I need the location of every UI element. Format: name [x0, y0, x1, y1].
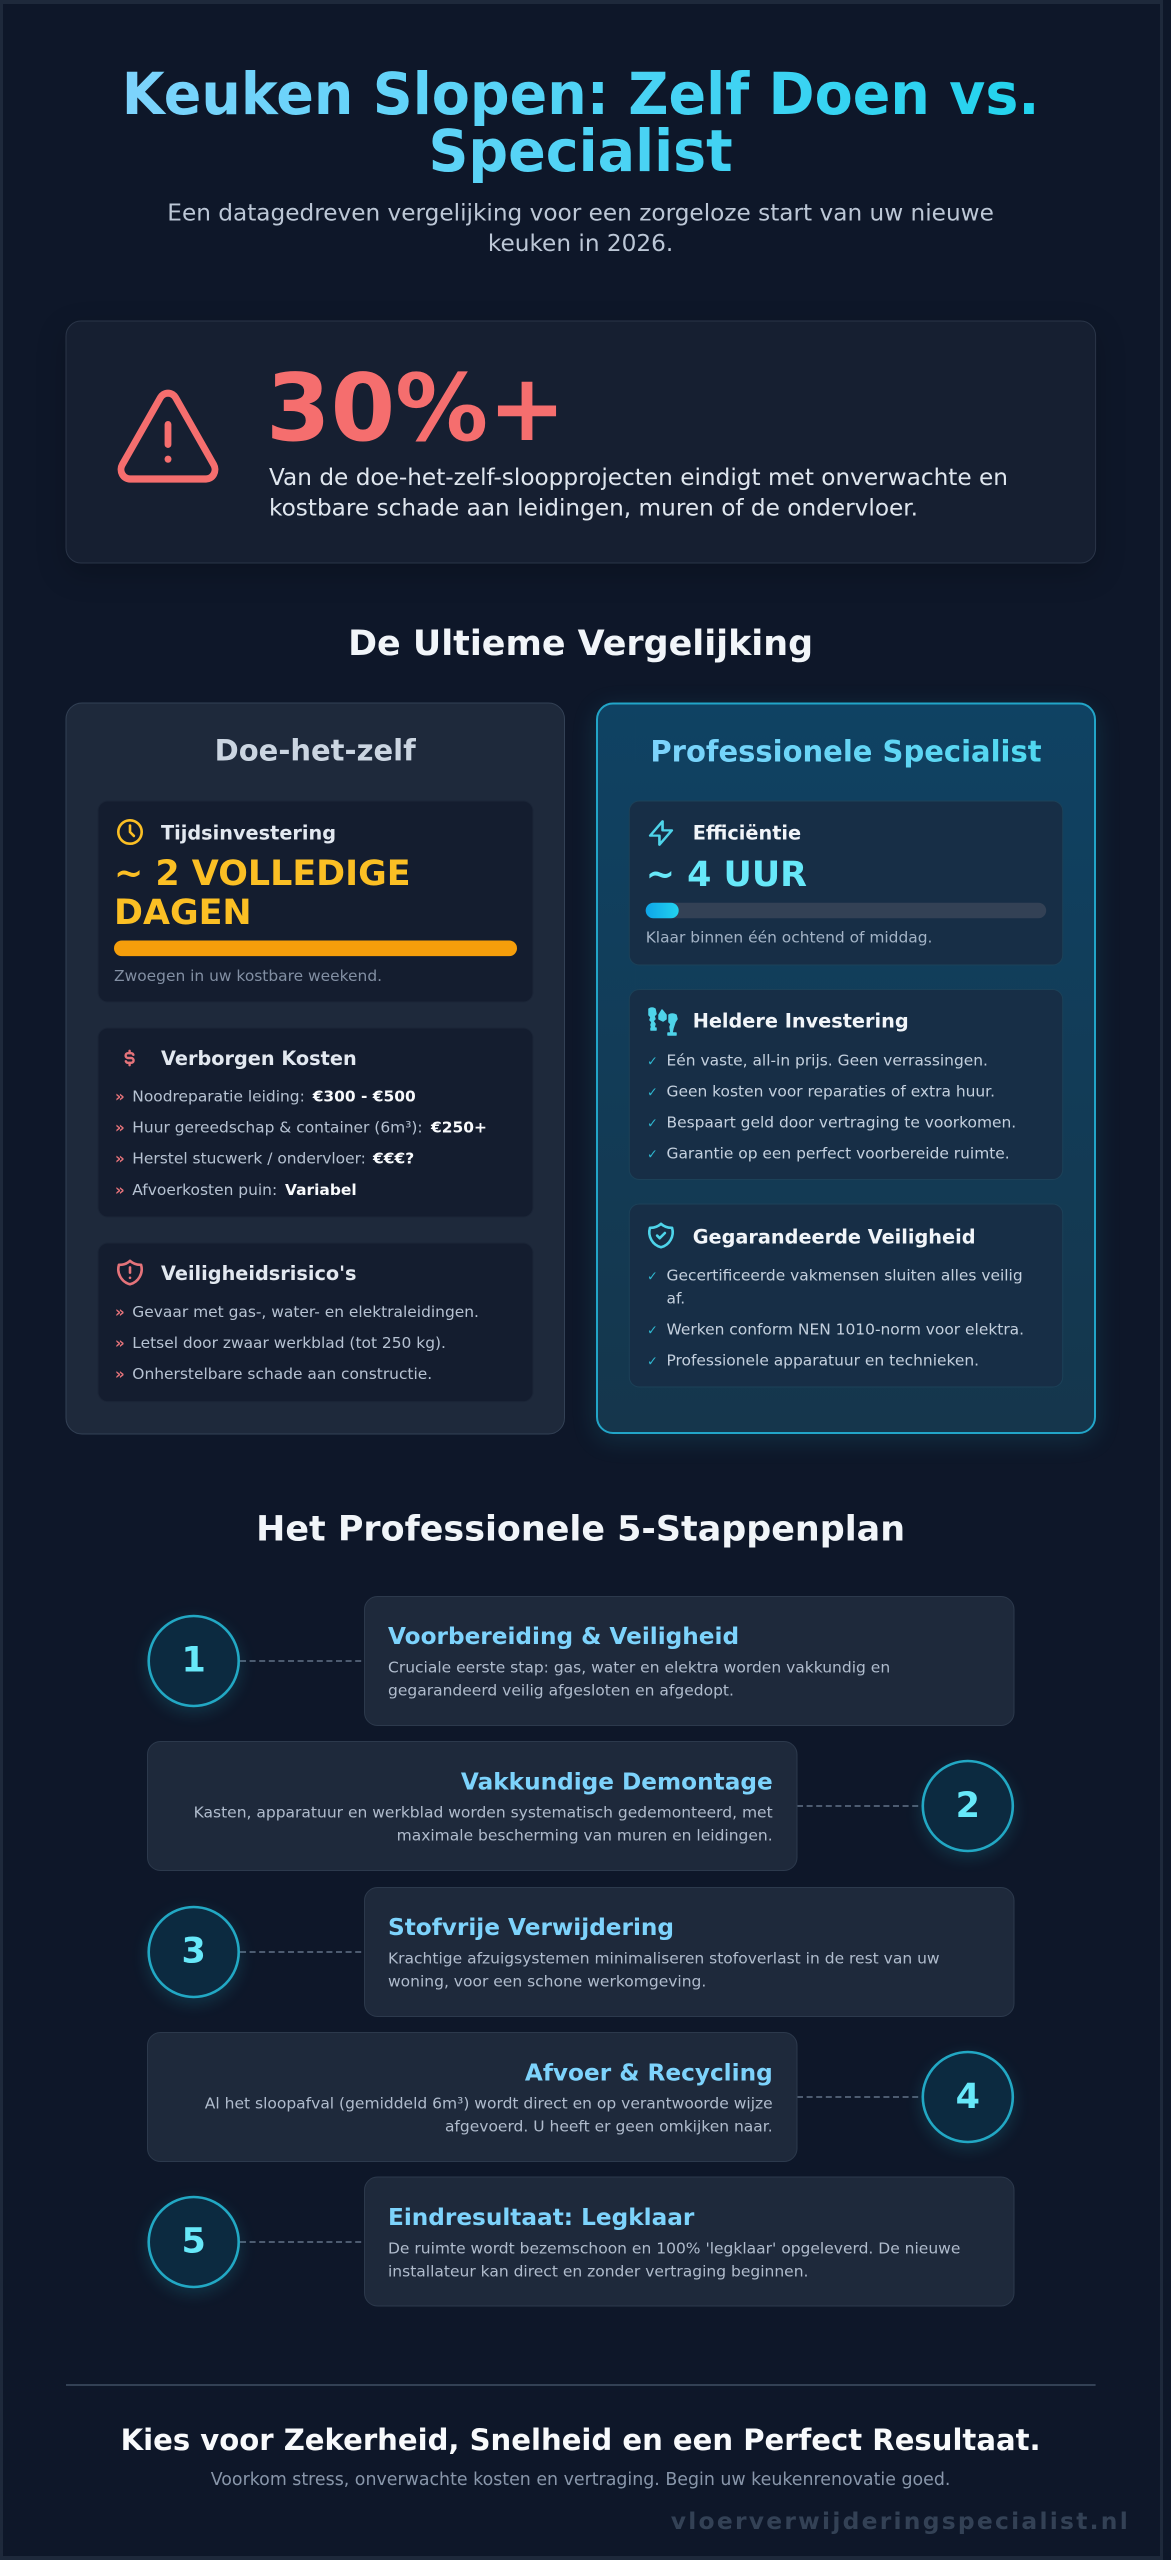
step 2: [148, 1742, 1013, 1870]
step card: [148, 1742, 797, 1870]
note: Zwoegen in uw kostbare weekend.: [114, 967, 382, 985]
step card: installateur kan direct en zonder vertraging beginnen.: [388, 2263, 808, 2281]
step card: Vakkundige Demontage: [461, 1768, 773, 1795]
step card: [148, 2032, 797, 2162]
panel: doe-het-zelf: [66, 703, 564, 1434]
safety list: ✓: [647, 1324, 658, 1339]
icon: bolt: [650, 821, 672, 845]
statistic description: [269, 464, 1008, 522]
card: efficiëntie: [629, 801, 1063, 965]
title: Keuken Slopen: Zelf Doen vs.: [122, 61, 1039, 128]
cost list: Huur gereedschap & container (6m³):: [132, 1119, 423, 1137]
step card: De ruimte wordt bezemschoon en 100% 'legklaar' opgeleverd. De nieuwe: [388, 2239, 960, 2257]
risk list: Letsel door zwaar werkblad (tot 250 kg).: [132, 1334, 446, 1352]
benefits list: [647, 1052, 1016, 1163]
progress bar: [646, 903, 1046, 918]
safety list: Werken conform NEN 1010-norm voor elektra.: [666, 1321, 1024, 1339]
step 1: [149, 1596, 1014, 1726]
step card: Voorbereiding & Veiligheid: [388, 1623, 739, 1650]
cost list: »: [115, 1150, 125, 1168]
safety list: [647, 1266, 1024, 1370]
panel: key statistic: [66, 321, 1096, 563]
step card: Al het sloopafval (gemiddeld 6m³) wordt direct en op verantwoorde wijze: [205, 2094, 773, 2112]
value: ~ 4 UUR: [646, 855, 807, 895]
card: gegarandeerde veiligheid: [629, 1204, 1063, 1387]
step number: 4: [956, 2077, 980, 2117]
safety list: af.: [666, 1290, 685, 1308]
label: Tijdsinvestering: [161, 821, 336, 844]
safety list: ✓: [647, 1355, 658, 1370]
risk list: »: [115, 1365, 125, 1383]
icon: dollar: [126, 1051, 134, 1065]
step card: Krachtige afzuigsystemen minimaliseren stofoverlast in de rest van uw: [388, 1949, 940, 1967]
risk list: »: [115, 1303, 125, 1321]
safety list: Professionele apparatuur en technieken.: [666, 1352, 979, 1370]
icon: shield alert: [118, 1261, 142, 1284]
footer subline: Voorkom stress, onverwachte kosten en vertraging. Begin uw keukenrenovatie goed.: [211, 2470, 950, 2490]
icon: cost symbol: [649, 1008, 677, 1035]
cost list: Noodreparatie leiding:: [132, 1088, 305, 1106]
step card: [364, 1888, 1014, 2016]
benefits list: ✓: [647, 1086, 658, 1101]
label: Gegarandeerde Veiligheid: [693, 1226, 976, 1248]
step number: 5: [182, 2222, 206, 2262]
subtitle: Een datagedreven vergelijking voor een zorgeloze start van uw nieuwe: [167, 200, 994, 227]
safety list: Gecertificeerde vakmensen sluiten alles veilig: [666, 1266, 1023, 1284]
step card: woning, voor een schone werkomgeving.: [388, 1973, 706, 1991]
step card: [364, 1596, 1014, 1726]
label: Efficiëntie: [693, 821, 801, 844]
step 4: [148, 2032, 1013, 2162]
step card: gegarandeerd veilig afgesloten en afgedopt.: [388, 1682, 734, 1700]
step number: 1: [182, 1641, 206, 1681]
panel heading: Doe-het-zelf: [215, 734, 416, 768]
step 3: [149, 1888, 1014, 2016]
statistic description: Van de doe-het-zelf-sloopprojecten eindigt met onverwachte en: [269, 464, 1008, 491]
benefits list: ✓: [647, 1117, 658, 1132]
cost list: [115, 1088, 487, 1199]
step card: [364, 2177, 1014, 2306]
footer headline: Kies voor Zekerheid, Snelheid en een Perfect Resultaat.: [121, 2423, 1041, 2457]
risk list: »: [115, 1334, 125, 1352]
progress bar: [114, 940, 517, 956]
step card: maximale bescherming van muren en leidingen.: [397, 1827, 773, 1845]
cost list: €€€?: [372, 1150, 414, 1168]
cost list: »: [115, 1088, 125, 1106]
step number: [149, 2197, 239, 2287]
step number: [923, 2052, 1013, 2142]
step card: Afvoer & Recycling: [525, 2059, 773, 2086]
card: verborgen kosten: [98, 1028, 533, 1217]
safety list: ✓: [647, 1269, 658, 1284]
panel heading: Professionele Specialist: [650, 734, 1042, 768]
subtitle: keuken in 2026.: [488, 230, 673, 257]
label: Heldere Investering: [693, 1010, 909, 1033]
cost list: Afvoerkosten puin:: [132, 1181, 277, 1199]
title: Specialist: [428, 118, 733, 185]
cost list: Herstel stucwerk / ondervloer:: [132, 1150, 366, 1168]
benefits list: Bespaart geld door vertraging te voorkomen.: [666, 1114, 1016, 1132]
step number: 2: [956, 1786, 980, 1826]
icon: shield check: [649, 1224, 673, 1247]
risk list: Gevaar met gas-, water- en elektraleidingen.: [132, 1303, 479, 1321]
value: [114, 854, 411, 933]
label: Verborgen Kosten: [161, 1047, 357, 1070]
step card: Eindresultaat: Legklaar: [388, 2204, 695, 2231]
step card: afgevoerd. U heeft er geen omkijken naar.: [445, 2118, 773, 2136]
benefits list: Eén vaste, all-in prijs. Geen verrassingen.: [666, 1052, 988, 1070]
watermark: vloerverwijderingspecialist.nl: [671, 2507, 1130, 2535]
big number: 30%+: [266, 354, 566, 462]
benefits list: ✓: [647, 1055, 658, 1070]
icon: clock: [118, 820, 142, 844]
heading: comparison: De Ultieme Vergelijking: [348, 624, 813, 664]
label: Veiligheidsrisico's: [161, 1262, 357, 1285]
note: Klaar binnen één ochtend of middag.: [646, 929, 932, 947]
value: ~ 2 VOLLEDIGE: [114, 854, 411, 894]
panel: professionele specialist: [597, 704, 1095, 1433]
icon: warning triangle: [121, 393, 215, 479]
cost list: »: [115, 1181, 125, 1199]
benefits list: ✓: [647, 1148, 658, 1163]
step number: [149, 1616, 239, 1706]
cost list: €300 - €500: [312, 1088, 416, 1106]
value: DAGEN: [114, 893, 252, 933]
cost list: »: [115, 1119, 125, 1137]
step number: [149, 1907, 239, 1997]
title: [122, 61, 1039, 185]
card: heldere investering: [629, 990, 1063, 1180]
step number: 3: [182, 1932, 206, 1972]
cost list: Variabel: [285, 1181, 357, 1199]
step card: Kasten, apparatuur en werkblad worden systematisch gedemonteerd, met: [194, 1803, 773, 1821]
benefits list: Geen kosten voor reparaties of extra huur.: [666, 1083, 995, 1101]
step 5: [149, 2177, 1014, 2306]
subtitle: [167, 200, 994, 257]
step card: Stofvrije Verwijdering: [388, 1914, 674, 1941]
statistic description: kostbare schade aan leidingen, muren of de ondervloer.: [269, 495, 918, 522]
card: tijdsinvestering: [98, 801, 533, 1002]
heading: stappenplan: Het Professionele 5-Stappenplan: [256, 1510, 905, 1550]
cost list: €250+: [430, 1119, 487, 1137]
step card: Cruciale eerste stap: gas, water en elektra worden vakkundig en: [388, 1658, 890, 1676]
risk list: [115, 1303, 479, 1383]
step number: [923, 1761, 1013, 1851]
card: veiligheidsrisico's: [98, 1243, 533, 1402]
risk list: Onherstelbare schade aan constructie.: [132, 1365, 432, 1383]
benefits list: Garantie op een perfect voorbereide ruimte.: [666, 1145, 1010, 1163]
